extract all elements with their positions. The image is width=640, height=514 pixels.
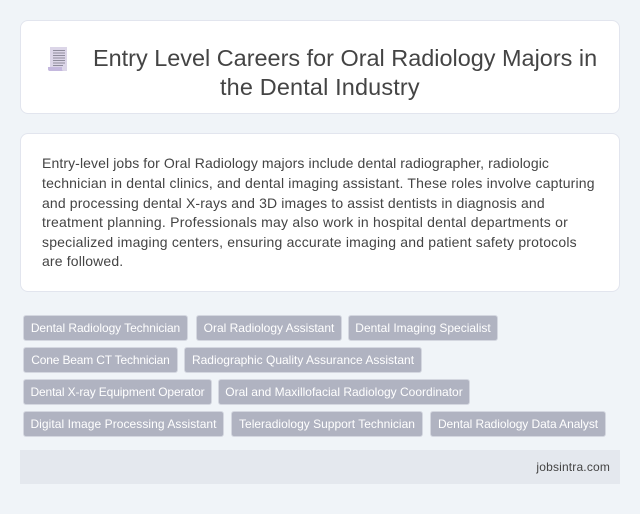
tag: Cone Beam CT Technician (31, 353, 170, 367)
description text: are followed. (42, 253, 123, 269)
tag: Dental Radiology Data Analyst (438, 417, 598, 431)
icon: document scroll (48, 47, 67, 71)
tag (430, 411, 606, 437)
job tags (23, 315, 606, 437)
tag: Digital Image Processing Assistant (30, 417, 217, 431)
description text: treatment planning. Professionals may also work in hospital dental departments or (42, 214, 568, 230)
description text: specialized imaging centers, ensuring accurate imaging and patient safety protocols (42, 234, 577, 250)
tag (196, 315, 342, 341)
tag (23, 411, 224, 437)
tag: Dental X-ray Equipment Operator (30, 385, 205, 399)
tag (23, 315, 188, 341)
tag: Oral Radiology Assistant (204, 321, 334, 335)
description text (42, 155, 595, 269)
tag (348, 315, 498, 341)
tag (231, 411, 423, 437)
tag (23, 347, 178, 373)
tag: Dental Imaging Specialist (355, 321, 491, 335)
tag (23, 379, 212, 405)
tag: Teleradiology Support Technician (239, 417, 415, 431)
tag: Dental Radiology Technician (31, 321, 180, 335)
description panel (20, 133, 620, 292)
tag (184, 347, 422, 373)
source label: jobsintra.com (536, 460, 610, 474)
header panel (20, 20, 620, 114)
title (93, 45, 597, 100)
description text: Entry-level jobs for Oral Radiology majors include dental radiographer, radiologic (42, 155, 549, 171)
footer bar (20, 450, 620, 484)
tag (218, 379, 470, 405)
description text: and processing dental X-rays and 3D images to assist dentists in diagnosis and (42, 195, 545, 211)
title: Entry Level Careers for Oral Radiology Majors in (93, 45, 597, 71)
description text: technician in dental clinics, and dental imaging assistant. These roles involve capturing (42, 175, 595, 191)
tag: Oral and Maxillofacial Radiology Coordinator (225, 385, 463, 399)
title: the Dental Industry (220, 74, 420, 100)
tag: Radiographic Quality Assurance Assistant (192, 353, 414, 367)
